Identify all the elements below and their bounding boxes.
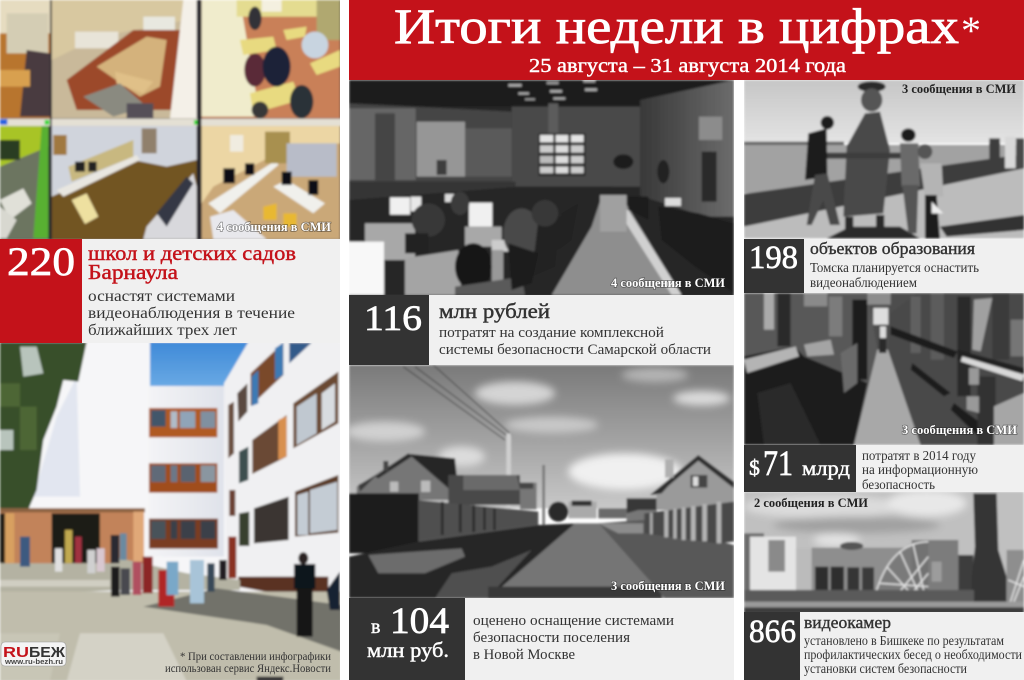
number 198: 198 [749, 240, 798, 276]
prefix: в [371, 616, 380, 638]
body text: установки систем безопасности [804, 661, 967, 676]
body text: безопасность [862, 477, 935, 492]
photo: statue on embankment [744, 80, 1024, 238]
stat panel: 104 [349, 598, 734, 680]
body text: на информационную [862, 462, 978, 477]
body text: ближайших трех лет [88, 322, 237, 339]
number 104: 104 [390, 601, 449, 642]
body text [439, 325, 711, 358]
stat panel: 866 [744, 612, 1024, 680]
heading: видеокамер [804, 613, 891, 632]
media count caption: 4 сообщения в СМИ [611, 275, 725, 290]
heading line 2: Барнаула [88, 260, 179, 284]
number 71: 71 [763, 443, 793, 483]
logo: RUБЕЖ: БЕЖ [29, 644, 65, 661]
heading: объектов образования [810, 239, 975, 258]
media count caption: 2 сообщения в СМИ [754, 495, 868, 510]
dollar sign: $ [749, 455, 760, 480]
photo: school building [0, 340, 341, 680]
number 116: 116 [364, 298, 422, 338]
media count caption: 3 сообщения в СМИ [611, 578, 725, 593]
media count caption: 4 сообщения в СМИ [217, 219, 331, 234]
body text: безопасности поселения [473, 630, 630, 646]
windows center [149, 408, 217, 437]
number 866: 866 [749, 614, 796, 650]
logo: RUБЕЖ: www.ru-bezh.ru [4, 659, 63, 666]
body text: оснастят системами [88, 288, 235, 305]
body text [473, 613, 674, 663]
photo: control room [349, 80, 734, 297]
media count caption: 3 сообщения в СМИ [902, 422, 1017, 437]
number 220: 220 [7, 239, 75, 284]
unit: млн руб. [367, 638, 449, 662]
body text: видеонаблюдения в течение [88, 305, 295, 322]
body text: в Новой Москве [473, 647, 575, 663]
red stat panel: 220 [0, 239, 340, 343]
media count caption: 3 сообщения в СМИ [902, 81, 1016, 96]
body text [810, 260, 979, 290]
date range: 25 августа – 31 августа 2014 года [529, 55, 846, 77]
header band [349, 0, 1024, 80]
body text [88, 288, 295, 339]
body text: потратят на создание комплексной [439, 325, 664, 341]
body text: установлено в Бишкеке по результатам [804, 633, 1004, 648]
people [20, 537, 30, 567]
photo: server corridor [744, 293, 1024, 445]
photo: settlement road [345, 365, 734, 599]
photo: classroom surveillance camera grid [0, 0, 341, 240]
footnote: использован сервис Яндекс.Новости [165, 661, 332, 675]
windows right [251, 343, 283, 406]
unit: млрд [802, 458, 850, 480]
body text: Томска планируется оснастить [810, 260, 979, 275]
body text: потратят в 2014 году [862, 448, 976, 463]
ground [0, 558, 242, 593]
logo: RUБЕЖ: RU [3, 644, 29, 661]
heading: schools: школ и детских садов [88, 241, 296, 265]
footnote: * При составлении инфографики [180, 649, 332, 663]
body text: оценено оснащение системами [473, 613, 674, 629]
photo: Bishkek square [743, 490, 1024, 615]
stat panel: 116 [349, 295, 734, 365]
stat panel: 198 [744, 239, 1024, 293]
footnote [165, 649, 332, 675]
body text [862, 448, 978, 492]
logo: RUБЕЖ [1, 642, 66, 666]
heading: млн рублей [439, 299, 550, 323]
title asterisk: * [961, 8, 981, 53]
body text [804, 633, 1022, 676]
body text: видеонаблюдением [810, 275, 917, 290]
stat panel: $71 billion [744, 443, 1024, 492]
body text: системы безопасности Самарской области [439, 342, 711, 358]
